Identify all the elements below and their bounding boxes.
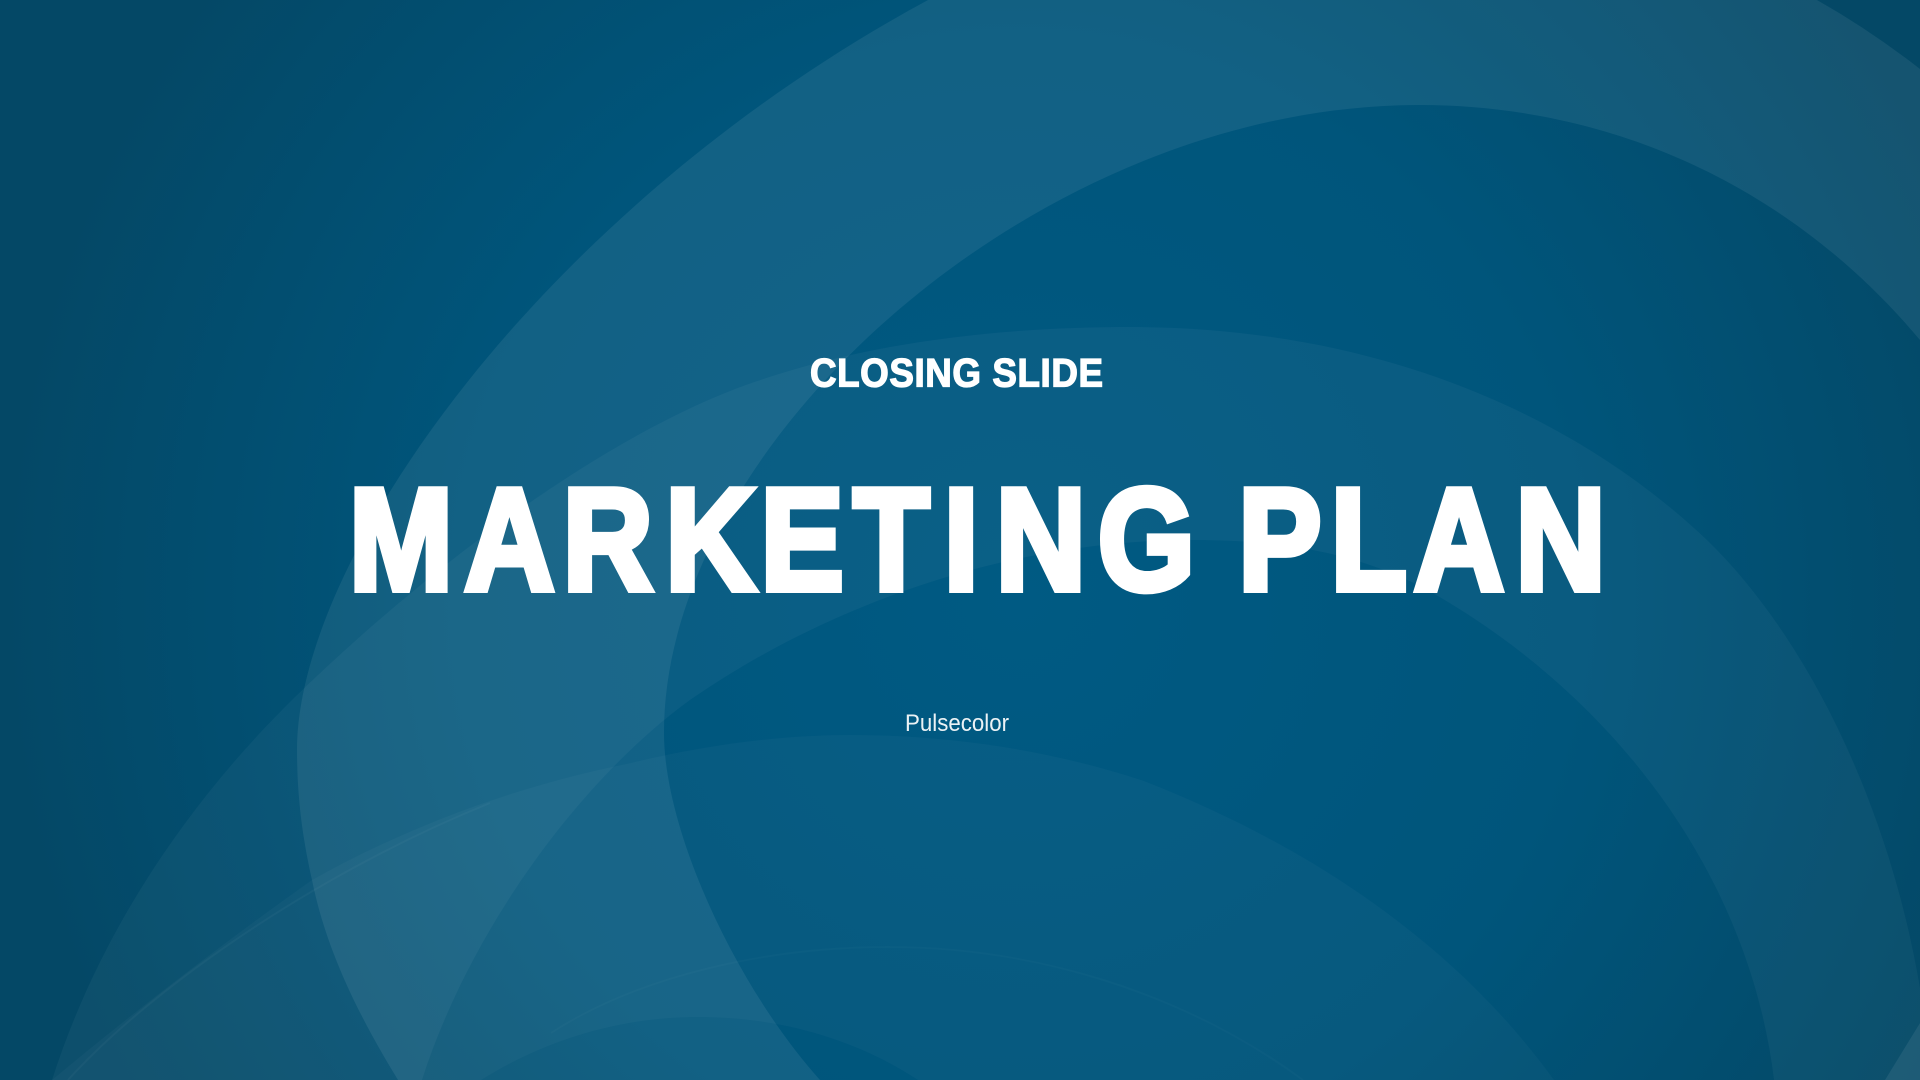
streak: thin bottom arc — [551, 947, 1303, 1080]
subtitle: brand name: Pulsecolor — [905, 710, 1009, 737]
band: lower crescent — [52, 735, 1554, 1080]
band: bottom-right corner sliver — [1885, 1023, 1920, 1080]
band: middle crescent — [52, 327, 1920, 1080]
title: marketing plan: MARKETING PLAN — [349, 459, 1606, 621]
heading: closing slide label: CLOSING SLIDE — [810, 351, 1103, 396]
streak: thin lower-left arc — [68, 803, 490, 1080]
